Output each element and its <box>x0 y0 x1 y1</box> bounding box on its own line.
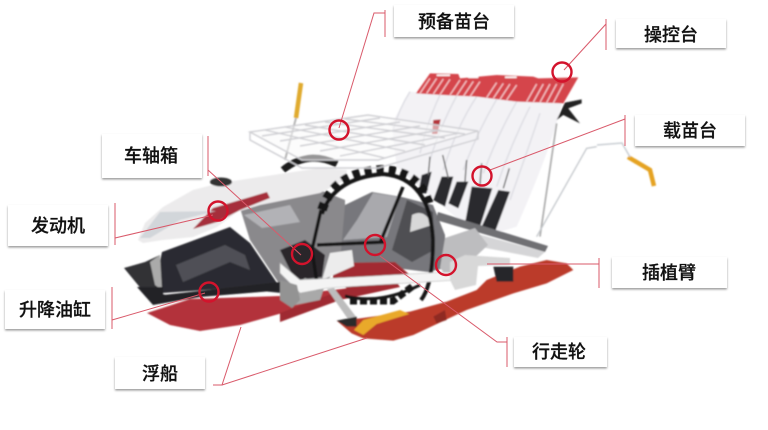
right float <box>337 260 573 341</box>
label: 操控台 <box>616 19 726 48</box>
label: 升降油缸 <box>5 290 105 329</box>
seedling rack <box>250 115 478 168</box>
label: 插植臂 <box>612 257 727 288</box>
rice transplanter machine <box>124 73 654 341</box>
marker circles <box>200 62 572 302</box>
label: 载苗台 <box>635 115 745 146</box>
engine area <box>240 190 345 285</box>
label: 载苗台: 载苗台 <box>663 121 717 141</box>
seedling tray <box>392 73 597 237</box>
handle and lever <box>285 83 654 186</box>
label: 车轴箱 <box>102 134 202 178</box>
leader lines <box>112 10 625 385</box>
transplanting rail <box>436 212 548 252</box>
label: 操控台: 操控台 <box>644 25 698 45</box>
label: 预备苗台 <box>394 5 514 37</box>
label: 浮船 <box>115 357 205 389</box>
label: 发动机 <box>8 205 108 246</box>
label: 车轴箱: 车轴箱 <box>124 146 178 166</box>
label: 插植臂: 插植臂 <box>642 262 696 283</box>
label: 升降油缸: 升降油缸 <box>19 299 91 320</box>
engine cover <box>158 227 281 293</box>
left float <box>147 288 350 331</box>
label: 预备苗台: 预备苗台 <box>418 12 490 32</box>
main wheel <box>312 170 433 301</box>
machinery inside wheel <box>340 192 445 272</box>
label: 行走轮 <box>514 337 607 367</box>
rear wheel arc <box>283 158 337 170</box>
front frame tube <box>280 263 457 293</box>
label: 发动机: 发动机 <box>31 216 85 236</box>
label: 浮船: 浮船 <box>142 364 178 384</box>
hood <box>138 168 347 243</box>
label: 行走轮: 行走轮 <box>532 342 586 362</box>
